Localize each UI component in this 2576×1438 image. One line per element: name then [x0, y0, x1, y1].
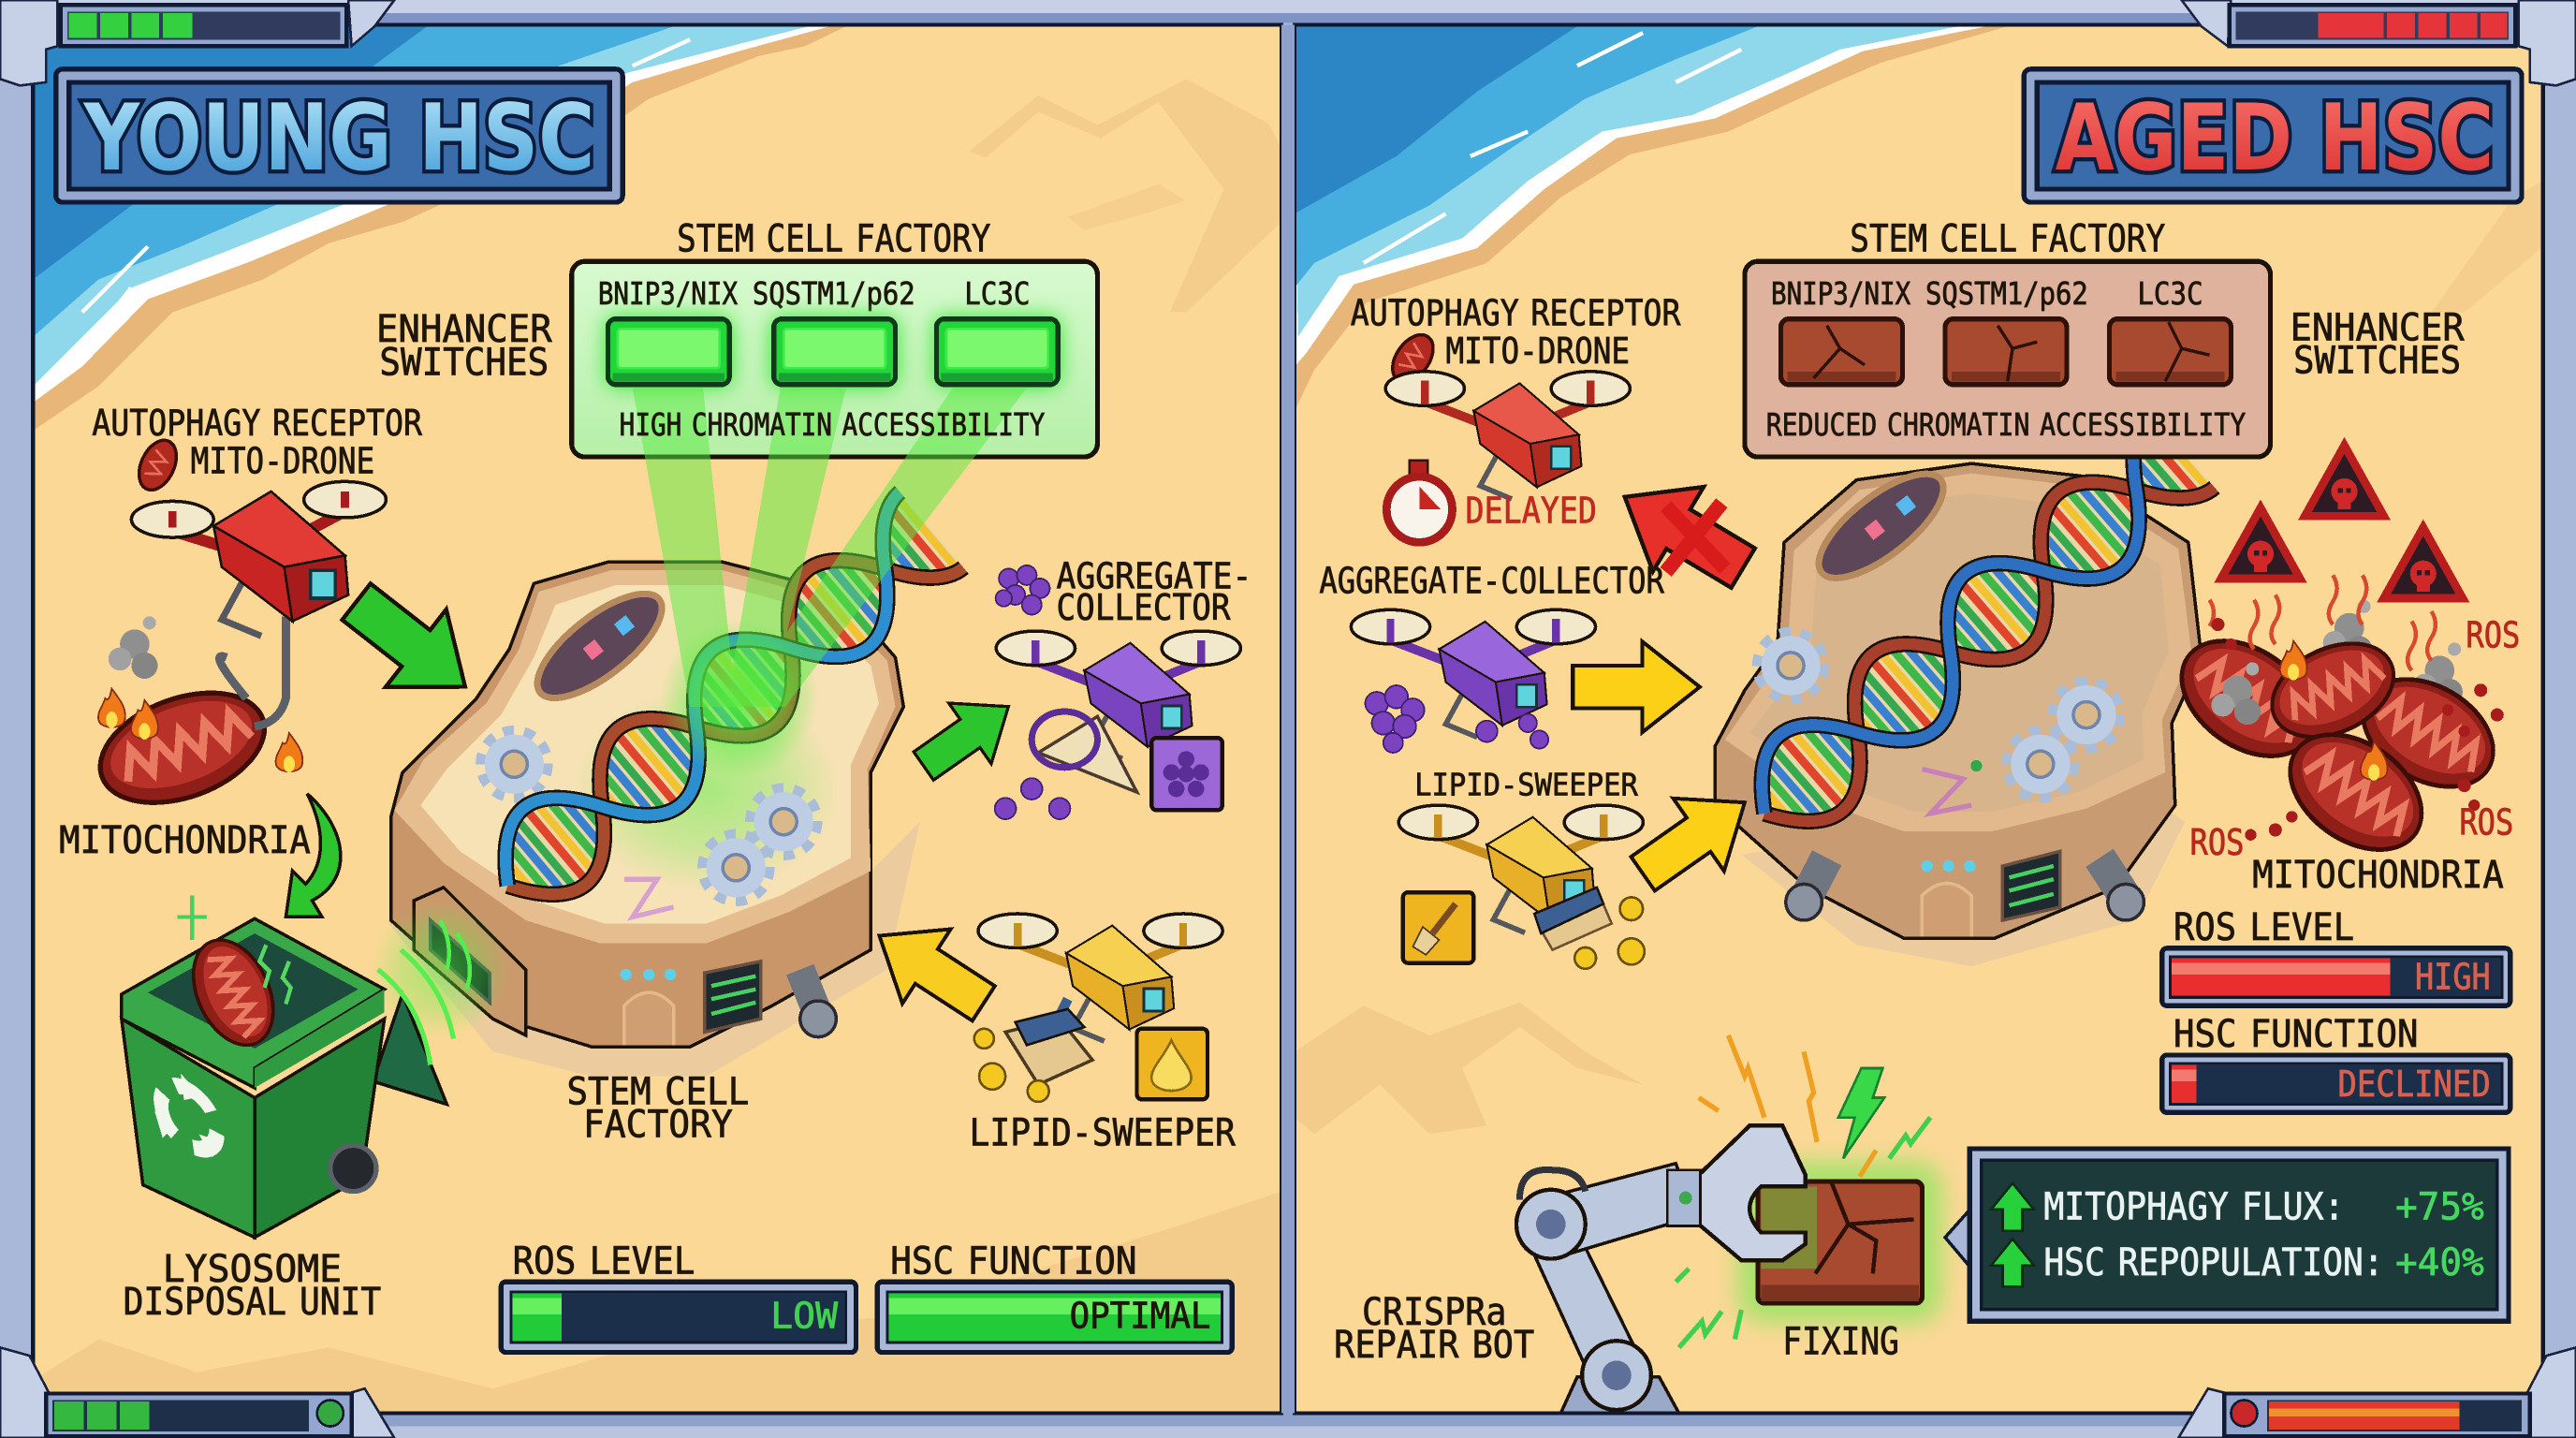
brick being fixed [1758, 1181, 1922, 1303]
DNA glow [661, 620, 818, 777]
drone: aggregate collector [1351, 609, 1596, 737]
factory front details [1922, 851, 2060, 937]
icon: aggregate tile [1151, 738, 1222, 810]
panel: young HSC background [33, 26, 1281, 1414]
status light [317, 1400, 344, 1427]
lipid particles [974, 1029, 1049, 1102]
cracked switches [1781, 319, 2231, 385]
drone: mito-drone with hook [131, 481, 386, 726]
status bar: top left [61, 5, 346, 46]
status light [2231, 1400, 2258, 1427]
panel text [2043, 1184, 2484, 1284]
icon: purple aggregate cluster [996, 565, 1050, 615]
icon: mini mitochondrion [132, 434, 183, 496]
status bar: top right [2230, 5, 2515, 46]
lysosome disposal bin [122, 896, 446, 1238]
labels: young panel: AGGREGATE- [1057, 555, 1251, 597]
arrow: blocked red [1600, 455, 1768, 610]
labels: aged panel: LIPID-SWEEPER [1414, 767, 1639, 803]
switch labels: BNIP3/NIX [1771, 275, 1910, 312]
gauge: young ROS level [501, 1282, 856, 1353]
mitochondrion inside factory [1804, 456, 1959, 595]
labels: aged panel [1319, 217, 2520, 1367]
labels: young panel: AUTOPHAGY RECEPTOR [92, 403, 423, 445]
factory front details [621, 961, 836, 1045]
switch labels: SQSTM1/p62 [1925, 275, 2088, 312]
factory door [414, 888, 526, 1035]
stem cell factory [1715, 413, 2215, 966]
icon: red X [1666, 503, 1725, 572]
switch labels [1771, 275, 2203, 312]
DNA helix [1732, 413, 2215, 851]
labels: young panel: MITO-DRONE [191, 441, 374, 483]
labels: young panel: DISPOSAL UNIT [124, 1280, 381, 1324]
drone: delayed mito-drone [1385, 372, 1630, 499]
labels: young panel: MITOCHONDRIA [59, 818, 311, 862]
gauge: young ROS level: LOW [770, 1295, 839, 1337]
labels: aged panel: STEM CELL FACTORY [1850, 217, 2165, 261]
lipid particles [1574, 897, 1645, 969]
switch labels [599, 281, 1028, 311]
results panel [1945, 1149, 2509, 1321]
mitochondrion inside factory [534, 591, 665, 701]
labels: young panel: ROS LEVEL [513, 1239, 695, 1283]
labels: young panel: FACTORY [583, 1103, 733, 1147]
DNA helix [476, 492, 963, 923]
wrench head [1699, 1125, 1806, 1260]
title: young HSC: YOUNG HSC [83, 85, 594, 192]
icon: broom [1005, 999, 1092, 1085]
switch labels: SQSTM1/p62 [753, 275, 915, 312]
sand dunes [33, 79, 1281, 1414]
drone: lipid sweeper [978, 914, 1222, 1085]
labels: aged panel: HSC FUNCTION [2174, 1012, 2419, 1056]
drone: lipid sweeper [1398, 805, 1643, 950]
nucleotide marks [1922, 770, 1971, 814]
title: young HSC [56, 69, 622, 202]
switch labels: BNIP3/NIX [598, 275, 738, 312]
enhancer switch box [572, 261, 1097, 457]
labels: aged panel: SWITCHES [2293, 339, 2461, 383]
gears [481, 731, 816, 901]
gauge: aged HSC function [2162, 1055, 2510, 1112]
light beams from enhancer switches [633, 388, 1027, 707]
drone: aggregate collector [996, 631, 1240, 792]
labels: aged panel: AUTOPHAGY RECEPTOR [1351, 293, 1681, 335]
labels: young panel: ENHANCER [376, 307, 552, 351]
damaged mitochondria pile with ROS [2160, 575, 2512, 873]
gauge: young HSC function [877, 1282, 1232, 1353]
warning icons [2221, 446, 2463, 598]
door glow [376, 908, 502, 1034]
arrow: sweeper to factory [1617, 766, 1770, 910]
title: aged HSC [2024, 69, 2522, 202]
arrow: drone to factory [339, 580, 468, 689]
repair glow around brick [1738, 1162, 1942, 1323]
gauge: young HSC function: OPTIMAL [1070, 1295, 1211, 1337]
labels: aged panel: ROS [2466, 615, 2520, 657]
panel: aged HSC background [1295, 26, 2543, 1414]
icon: purple aggregates [1365, 685, 1548, 753]
status bar: bottom right [2224, 1393, 2530, 1436]
labels: young panel: LIPID-SWEEPER [970, 1110, 1236, 1154]
repair bot arm [1516, 1125, 1806, 1414]
icon: green lightning [1838, 1068, 1884, 1158]
glowing switches [607, 319, 1058, 385]
labels: young panel: COLLECTOR [1057, 587, 1231, 629]
panel text: +40% [2395, 1240, 2484, 1284]
chromatin caption: HIGH CHROMATIN ACCESSIBILITY [620, 406, 1045, 443]
icon: up arrows [1991, 1183, 2034, 1286]
icon: collector net [1032, 712, 1137, 792]
gauge: aged ROS level [2162, 948, 2510, 1005]
aggregate particles [995, 778, 1070, 819]
labels: young panel: HSC FUNCTION [890, 1239, 1137, 1283]
title: aged HSC: AGED HSC [2056, 85, 2494, 192]
labels: young panel: LYSOSOME [163, 1247, 342, 1291]
labels: aged panel: REPAIR BOT [1334, 1323, 1534, 1367]
labels: aged panel: ROS LEVEL [2174, 905, 2354, 949]
sand dunes [1295, 181, 2543, 1134]
arrow: factory to aggregate collector [912, 701, 1011, 783]
arrow: curved to disposal [285, 794, 341, 917]
labels: aged panel: MITOCHONDRIA [2252, 853, 2504, 897]
beach: sea and shoreline [33, 26, 846, 431]
labels: young panel: SWITCHES [379, 340, 549, 384]
icon: mini mitochondrion [1384, 328, 1442, 389]
gears [1758, 633, 2119, 797]
icon: broom head [1534, 888, 1612, 950]
labels: aged panel: MITO-DRONE [1445, 330, 1630, 373]
chromatin caption: REDUCED CHROMATIN ACCESSIBILITY [1766, 406, 2246, 443]
labels: aged panel: DELAYED [1466, 490, 1597, 532]
labels: young panel: STEM CELL [567, 1070, 749, 1114]
gauge: aged HSC function: DECLINED [2338, 1064, 2491, 1106]
labels: young panel [59, 217, 1251, 1324]
status bar: bottom left [46, 1393, 352, 1436]
stem cell factory [372, 492, 963, 1077]
enhancer switch box [1745, 261, 2271, 457]
panel text: MITOPHAGY FLUX: [2043, 1184, 2345, 1228]
beach: sea and shoreline [1295, 26, 2008, 411]
nucleotide marks [624, 879, 674, 917]
labels: young panel: STEM CELL FACTORY [677, 217, 990, 261]
labels: aged panel: CRISPRa [1362, 1290, 1506, 1334]
gauge: aged ROS level: HIGH [2415, 957, 2491, 999]
green signal waves [378, 950, 453, 1064]
pipes [1786, 858, 2144, 920]
labels: aged panel: ENHANCER [2291, 305, 2465, 349]
icon: recycling symbol [154, 1060, 224, 1170]
icon: stopwatch [1386, 461, 1453, 542]
sparks [1676, 1035, 1930, 1347]
switch labels: LC3C [964, 275, 1030, 312]
icon: broom tile [1403, 892, 1473, 963]
icon: lipid drop tile [1137, 1029, 1208, 1099]
labels: aged panel: FIXING [1782, 1319, 1899, 1363]
damaged mitochondrion [97, 616, 303, 805]
arrow: collector to factory [1573, 641, 1700, 732]
panel text: HSC REPOPULATION: [2043, 1240, 2384, 1284]
arrow: lipid sweeper to factory [877, 927, 998, 1023]
labels: aged panel: AGGREGATE-COLLECTOR [1319, 561, 1665, 603]
switch labels: LC3C [2137, 275, 2203, 312]
labels: aged panel: ROS [2459, 802, 2513, 844]
panel text: +75% [2395, 1184, 2484, 1228]
labels: aged panel: ROS [2190, 822, 2244, 864]
